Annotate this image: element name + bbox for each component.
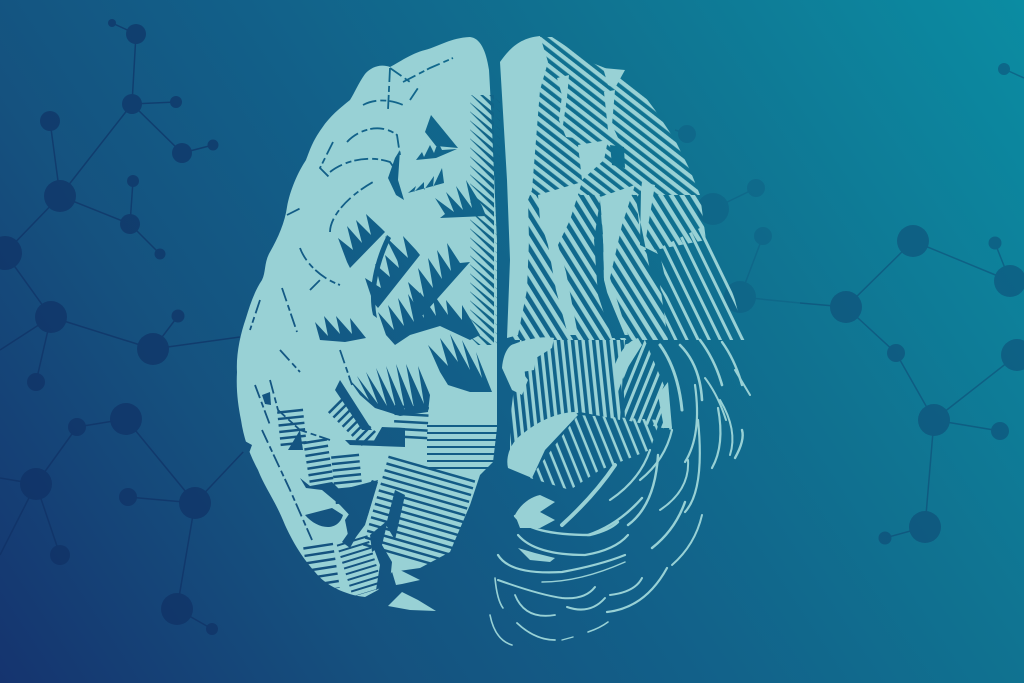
network: faint nodes behind brain — [675, 125, 800, 313]
sulci wedge creases, upper — [315, 115, 486, 345]
solid central gyrus — [500, 36, 548, 338]
sulci thin lines, upper left — [250, 58, 453, 440]
upper hatched gyri — [510, 37, 700, 195]
fragments below the left hemisphere — [388, 592, 436, 611]
brain — [237, 36, 750, 645]
lower solid gyri — [622, 340, 672, 430]
concentric arcs, lower right — [490, 340, 750, 645]
sulci creases, lower — [241, 334, 492, 592]
left hemisphere — [237, 37, 500, 611]
right edge teeth of left hemisphere — [470, 95, 500, 345]
network: left molecule cluster — [0, 19, 245, 635]
near-vertical hatched gyri — [510, 340, 625, 455]
dark sulcus gaps — [610, 145, 625, 168]
middle hatched gyri — [510, 195, 706, 340]
outer hatched gyri — [655, 225, 745, 340]
solid gyri patches — [557, 75, 575, 138]
right hemisphere — [490, 36, 750, 645]
network: right molecule cluster — [800, 63, 1024, 544]
